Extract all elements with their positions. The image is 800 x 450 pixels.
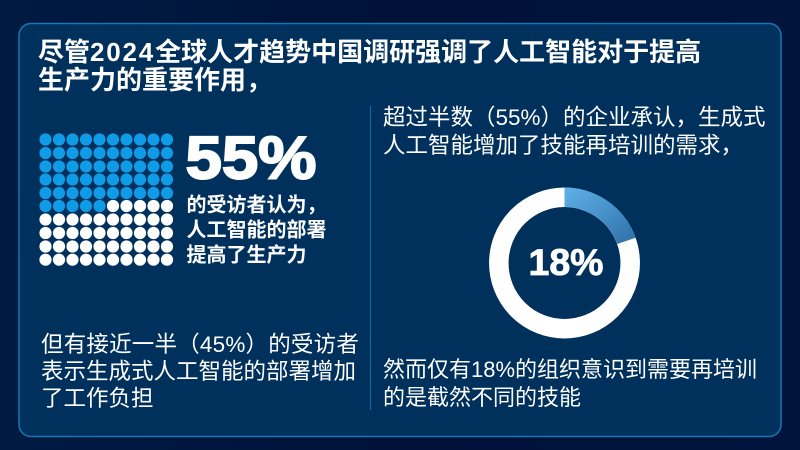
text block: workload: 但有接近一半（45%）的受访者 xyxy=(41,332,359,357)
dot matrix: 55 percent xyxy=(39,133,173,266)
text block: workload: 了工作负担 xyxy=(41,386,154,411)
donut value: 18% xyxy=(528,241,604,283)
text block: different skills: 然而仅有18%的组织意识到需要再培训 xyxy=(383,357,757,382)
text block: reskilling demand: 人工智能增加了技能再培训的需求， xyxy=(383,133,743,158)
text block: workload: 表示生成式人工智能的部署增加 xyxy=(41,359,356,384)
text block: reskilling demand xyxy=(383,105,766,158)
title: 尽管2024全球人才趋势中国调研强调了人工智能对于提高 xyxy=(38,37,701,67)
text block: reskilling demand: 超过半数（55%）的企业承认，生成式 xyxy=(383,105,766,130)
donut chart: 18 percent xyxy=(499,188,636,329)
text block: workload xyxy=(41,332,359,411)
big stat: 55%: 55% xyxy=(186,125,316,192)
stat caption: 人工智能的部署 xyxy=(186,218,326,242)
text block: different skills xyxy=(383,357,757,410)
text block: different skills: 的是截然不同的技能 xyxy=(383,385,581,410)
stat caption xyxy=(186,194,326,266)
divider xyxy=(370,106,372,410)
stat caption: 的受访者认为， xyxy=(186,194,326,216)
title: 生产力的重要作用， xyxy=(38,65,272,95)
title xyxy=(38,37,701,95)
stat caption: 提高了生产力 xyxy=(186,242,306,266)
